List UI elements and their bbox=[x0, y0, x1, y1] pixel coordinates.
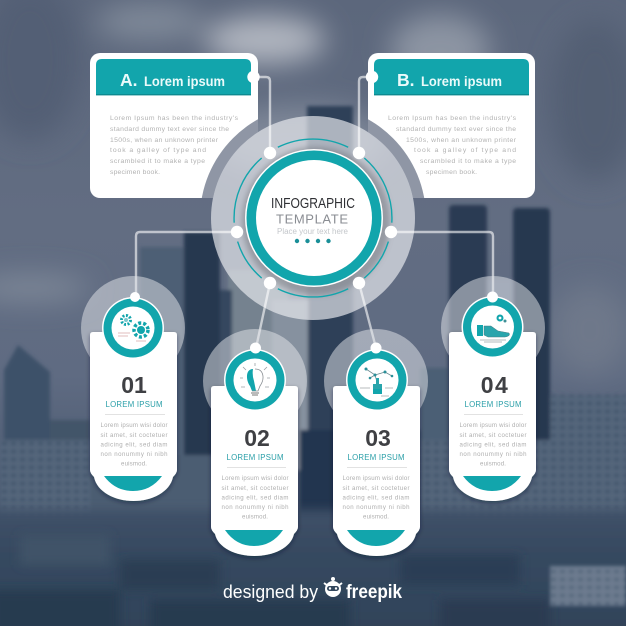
body text bbox=[342, 475, 410, 520]
panel A text bbox=[110, 115, 239, 176]
body text: sit amet, sit coctetuer bbox=[460, 432, 526, 439]
panel A text: took a galley of type and bbox=[110, 147, 206, 154]
body text bbox=[460, 422, 526, 468]
number: 04 bbox=[481, 372, 509, 398]
number: 03 bbox=[365, 425, 391, 451]
footer: freepik credit: freepik bbox=[346, 582, 402, 603]
card 03 bbox=[324, 329, 428, 556]
central translucent halo bbox=[211, 116, 415, 320]
footer: freepik credit bbox=[223, 577, 402, 603]
body text: sit amet, sit coctetuer bbox=[100, 432, 168, 439]
number: 01 bbox=[121, 372, 147, 398]
panel A text: 1500s, when an unknown printer bbox=[110, 137, 219, 144]
footer: freepik credit: designed by bbox=[223, 582, 318, 602]
icon: hand with coins bbox=[462, 296, 524, 358]
card 01 bbox=[81, 276, 185, 501]
icon: gears bbox=[102, 297, 164, 359]
thin teal orbit ring bbox=[234, 139, 392, 297]
card top nodes bbox=[130, 292, 498, 354]
panel A text: Lorem Ipsum has been the industry's bbox=[110, 115, 239, 122]
panel A header: A. bbox=[120, 70, 138, 90]
panel B header: Lorem ipsum bbox=[421, 73, 502, 89]
body text: euismod. bbox=[480, 460, 506, 468]
body text: Lorem ipsum wisi dolor bbox=[222, 475, 288, 482]
connector nodes bbox=[231, 71, 397, 289]
body text: euismod. bbox=[121, 460, 147, 468]
body text bbox=[100, 422, 168, 468]
panel B text: took a galley of type and bbox=[414, 147, 516, 154]
body text: adicing elit, sed diam bbox=[460, 442, 526, 448]
body text: non nonummy ni nibh bbox=[222, 504, 288, 511]
panel A text: scrambled it to make a type bbox=[110, 158, 205, 165]
body text bbox=[222, 475, 288, 520]
central ring shadow bbox=[242, 147, 390, 295]
body text: Lorem ipsum wisi dolor bbox=[460, 422, 526, 429]
dots bbox=[295, 239, 331, 243]
panel A header bbox=[96, 59, 251, 95]
panel B text: 1500s, when an unknown printer bbox=[406, 137, 517, 144]
body text: Lorem ipsum wisi dolor bbox=[342, 475, 410, 482]
label: LOREM IPSUM bbox=[226, 453, 284, 462]
label: LOREM IPSUM bbox=[348, 453, 404, 462]
body text: sit amet, sit coctetuer bbox=[222, 485, 288, 492]
body text: adicing elit, sed diam bbox=[342, 494, 410, 502]
body text: non nonummy ni nibh bbox=[342, 504, 410, 511]
panel B header bbox=[374, 59, 529, 95]
label: LOREM IPSUM bbox=[464, 400, 522, 409]
body text: adicing elit, sed diam bbox=[222, 494, 288, 502]
panel B text bbox=[388, 115, 517, 176]
icon: touch network bbox=[346, 349, 408, 411]
body text: adicing elit, sed diam bbox=[100, 442, 168, 448]
body text: non nonummy ni nibh bbox=[460, 451, 526, 458]
tagline: Place your text here bbox=[277, 227, 349, 236]
panel B header: B. bbox=[397, 70, 414, 90]
body text: euismod. bbox=[363, 514, 389, 520]
body text: non nonummy ni nibh bbox=[100, 451, 168, 458]
panel: A bbox=[90, 53, 258, 198]
subtitle: TEMPLATE bbox=[276, 212, 348, 226]
panel B text: specimen book. bbox=[426, 169, 477, 176]
connector lines bbox=[136, 77, 493, 348]
icon: freepik mascot bbox=[324, 577, 342, 597]
panel A text: standard dummy text ever since the bbox=[110, 126, 229, 133]
body text: Lorem ipsum wisi dolor bbox=[100, 422, 168, 429]
panel B text: standard dummy text ever since the bbox=[396, 126, 516, 133]
panel: B bbox=[368, 53, 535, 198]
panel B text: scrambled it to make a type bbox=[420, 158, 516, 165]
panel A header: Lorem ipsum bbox=[144, 73, 225, 89]
title: INFOGRAPHIC bbox=[271, 196, 355, 212]
card 02 bbox=[203, 329, 307, 556]
label: LOREM IPSUM bbox=[106, 400, 162, 409]
central circle bbox=[245, 149, 383, 287]
panel B text: Lorem Ipsum has been the industry's bbox=[388, 115, 517, 122]
icon: light bulb bbox=[224, 349, 286, 411]
panel A text: specimen book. bbox=[110, 169, 160, 176]
card 04 bbox=[441, 276, 545, 501]
number: 02 bbox=[244, 425, 270, 451]
body text: sit amet, sit coctetuer bbox=[342, 485, 410, 492]
body text: euismod. bbox=[242, 514, 268, 520]
